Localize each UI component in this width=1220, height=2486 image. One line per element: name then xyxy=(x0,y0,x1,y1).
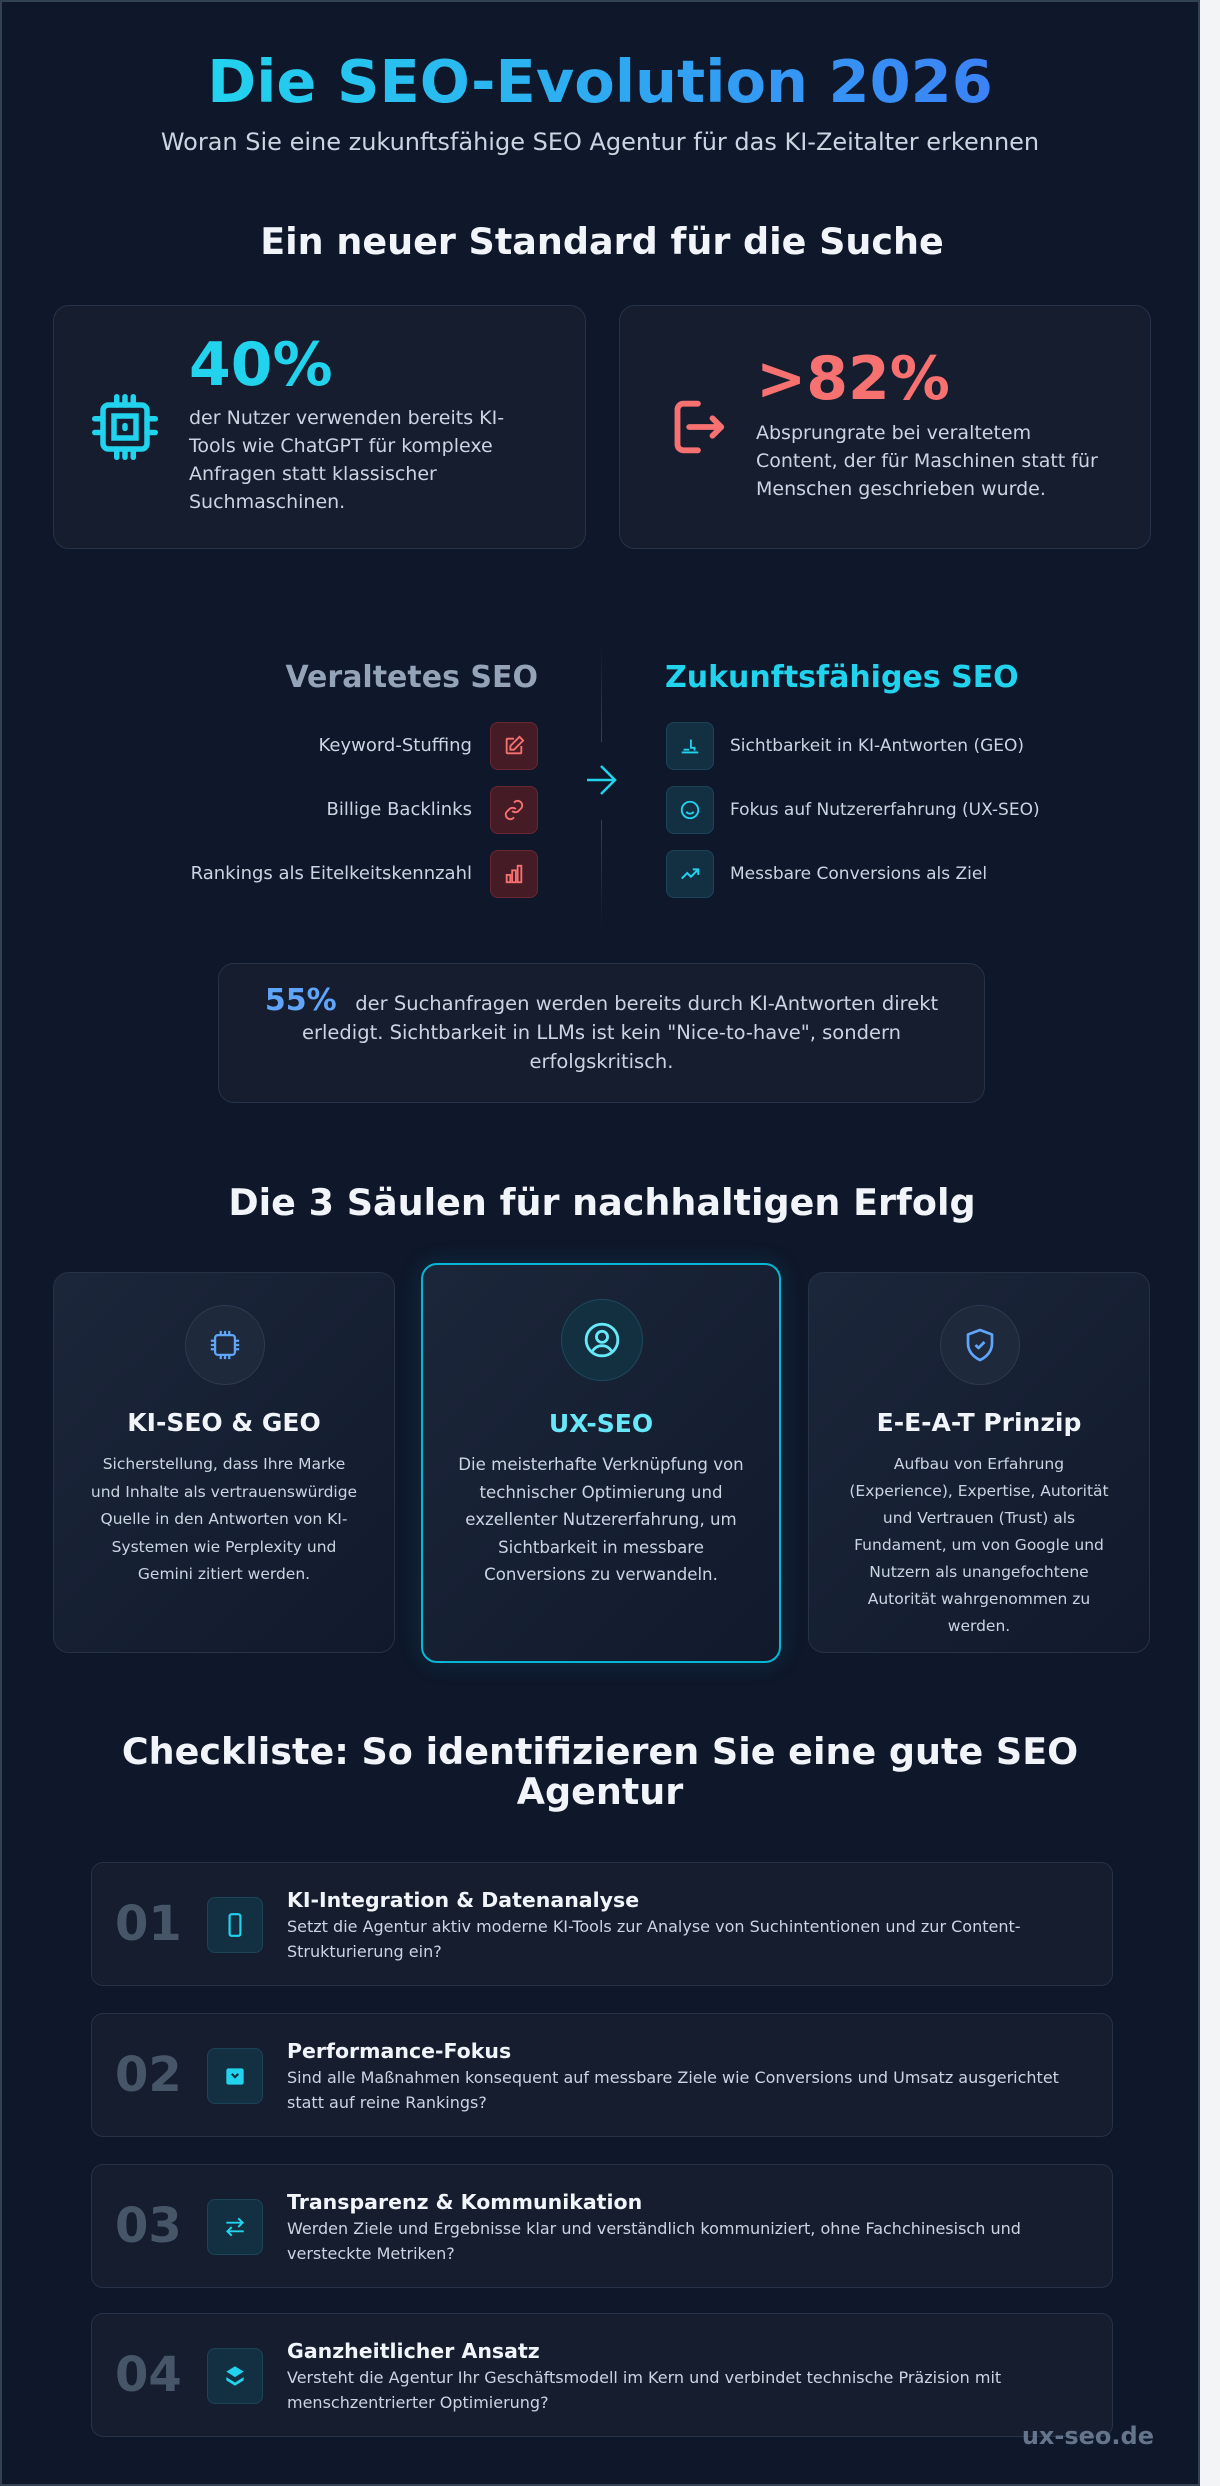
icon: user xyxy=(561,1299,643,1381)
stat text: Absprungrate bei veraltetem Content, der für Maschinen statt für Menschen geschrieben wurde. xyxy=(756,422,1098,500)
icon: chip xyxy=(185,1305,265,1385)
pillar: UX-SEO: UX-SEO xyxy=(549,1409,653,1438)
divider with arrow xyxy=(587,661,617,910)
stat card: 40% xyxy=(53,305,586,549)
checklist item 01: KI-Integration & Datenanalyse xyxy=(287,1888,639,1912)
checklist item 02: Sind alle Maßnahmen konsequent auf messbare Ziele wie Conversions und Umsatz ausgerichtet statt auf reine Rankings? xyxy=(287,2068,1059,2112)
checklist item 02 xyxy=(91,2013,1113,2137)
icon: exit xyxy=(674,400,724,454)
new item 3 xyxy=(666,850,987,898)
icon: phone xyxy=(207,1897,263,1953)
old item 1 xyxy=(318,722,538,770)
new item 1 xyxy=(666,722,1024,770)
heading: Checkliste: Checkliste: So identifizieren Sie eine gute SEO Agentur xyxy=(122,1730,1078,1813)
stat number: 40% xyxy=(189,330,333,400)
checklist item 04: Versteht die Agentur Ihr Geschäftsmodell im Kern und verbindet technische Präzision mit menschzentrierter Optimierung? xyxy=(287,2368,1001,2412)
pillar: KI-SEO: Sicherstellung, dass Ihre Marke und Inhalte als vertrauenswürdige Quelle in den Antworten von KI-Systemen wie Perplexity und Gemini zitiert werden. xyxy=(91,1455,357,1583)
checklist item 03: Transparenz & Kommunikation xyxy=(287,2190,642,2214)
pillar: UX-SEO: Die meisterhafte Verknüpfung von technischer Optimierung und exzellenter Nutzererfahrung, um Sichtbarkeit in messbare Conversions zu verwandeln. xyxy=(458,1455,744,1584)
old item 3 xyxy=(191,850,538,898)
checklist item 01: 01 xyxy=(115,1896,182,1952)
stat number: >82% xyxy=(756,344,950,414)
checklist item 03: Werden Ziele und Ergebnisse klar und verständlich kommuniziert, ohne Fachchinesisch und versteckte Metriken? xyxy=(287,2219,1021,2263)
new item 3: Messbare Conversions als Ziel xyxy=(730,864,987,884)
title: Die SEO-Evolution 2026 xyxy=(207,47,993,116)
heading: zukunft: Zukunftsfähiges SEO xyxy=(665,660,1019,695)
pillar: UX-SEO xyxy=(421,1263,781,1663)
checklist item 03 xyxy=(91,2164,1113,2288)
checklist item 03: 03 xyxy=(115,2198,182,2254)
checklist item 01: Setzt die Agentur aktiv moderne KI-Tools zur Analyse von Suchintentionen und zur Content-Strukturierung ein? xyxy=(287,1917,1021,1961)
comparison xyxy=(191,660,1040,910)
footer brand: ux-seo.de xyxy=(1022,2422,1154,2450)
subtitle: Woran Sie eine zukunftsfähige SEO Agentur für das KI-Zeitalter erkennen xyxy=(161,128,1039,156)
new item 2 xyxy=(666,786,1040,834)
old item 2 xyxy=(326,786,538,834)
pillar: KI-SEO xyxy=(53,1272,395,1653)
pillar: E-E-A-T: E-E-A-T Prinzip xyxy=(877,1408,1081,1437)
new item 2: Fokus auf Nutzererfahrung (UX-SEO) xyxy=(730,800,1040,820)
icon: arrows xyxy=(207,2199,263,2255)
old item 3: Rankings als Eitelkeitskennzahl xyxy=(191,863,472,884)
callout: 55% xyxy=(218,963,985,1103)
old item 1: Keyword-Stuffing xyxy=(318,735,472,756)
icon: chip xyxy=(92,394,158,460)
icon: shield xyxy=(940,1305,1020,1385)
new item 1: Sichtbarkeit in KI-Antworten (GEO) xyxy=(730,736,1024,756)
pillar: E-E-A-T: Aufbau von Erfahrung (Experience), Expertise, Autorität und Vertrauen (Trust) als Fundament, um von Google und Nutzern als unangefochtene Autorität wahrgenommen zu werden. xyxy=(849,1455,1109,1635)
checklist item 02: 02 xyxy=(115,2047,182,2103)
checklist item 04: Ganzheitlicher Ansatz xyxy=(287,2339,540,2363)
icon: check box xyxy=(207,2048,263,2104)
stat text: der Nutzer verwenden bereits KI-Tools wie ChatGPT für komplexe Anfragen statt klassischer Suchmaschinen. xyxy=(189,407,504,513)
heading: veraltet: Veraltetes SEO xyxy=(285,660,538,695)
icon: layers xyxy=(207,2348,263,2404)
heading: 3 Säulen: Die 3 Säulen für nachhaltigen Erfolg xyxy=(228,1181,976,1224)
pillar: E-E-A-T xyxy=(808,1272,1150,1653)
pillar: KI-SEO: KI-SEO & GEO xyxy=(127,1408,321,1437)
old item 2: Billige Backlinks xyxy=(326,799,472,820)
stat card: 82% xyxy=(619,305,1151,549)
checklist item 04 xyxy=(91,2313,1113,2437)
heading: neuer Standard: Ein neuer Standard für die Suche xyxy=(260,220,944,263)
checklist item 01 xyxy=(91,1862,1113,1986)
checklist item 02: Performance-Fokus xyxy=(287,2039,511,2063)
checklist item 04: 04 xyxy=(115,2347,182,2403)
callout: 55%: 55% der Suchanfragen werden bereits durch KI-Antworten direkt erledigt. Sichtbarkeit in LLMs ist kein "Nice-to-have", sondern erfolgskritisch. xyxy=(265,983,938,1073)
